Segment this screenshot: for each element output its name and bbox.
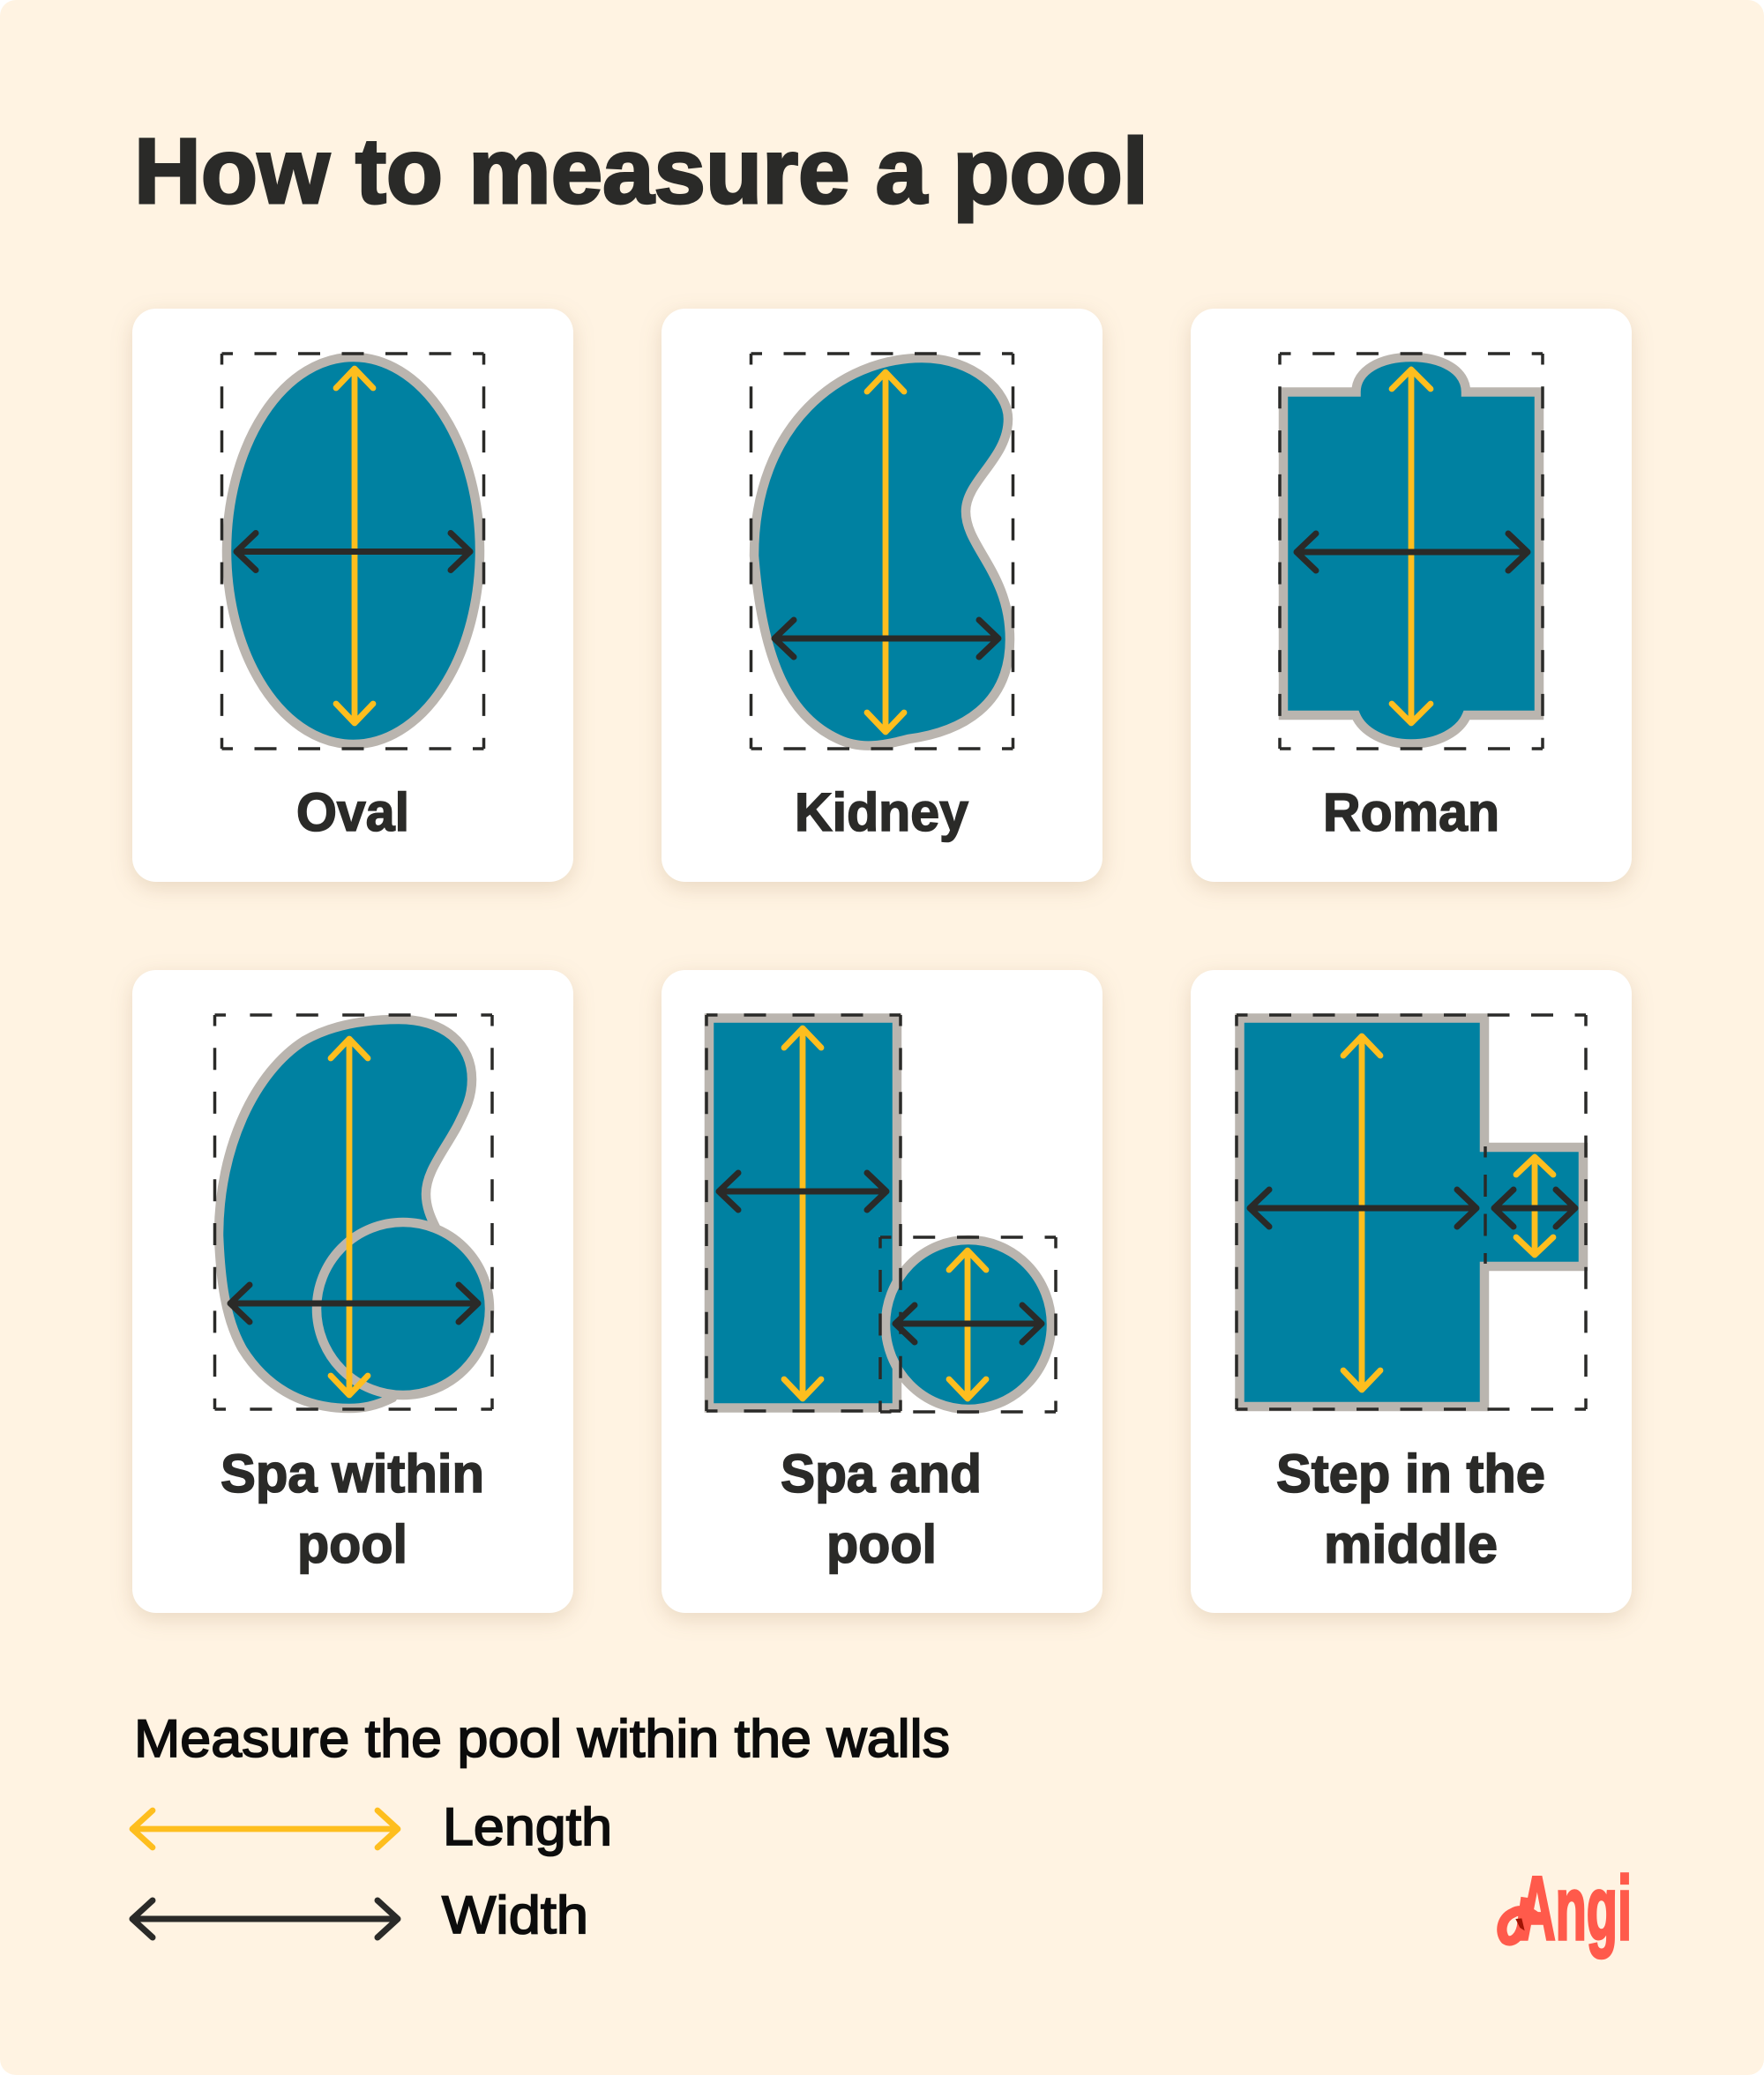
pool shape: rectangle	[709, 1018, 897, 1407]
length arrow: pool	[784, 1028, 821, 1399]
legend: width	[132, 1885, 588, 1944]
length arrow: step	[1516, 1157, 1553, 1255]
width arrow	[236, 533, 470, 570]
label: spa and pool	[781, 1444, 982, 1574]
width arrow: step	[1494, 1190, 1575, 1227]
label: roman: Roman	[1323, 782, 1499, 842]
length arrow: spa	[949, 1250, 986, 1399]
length arrow	[1392, 369, 1431, 723]
width arrow	[230, 1285, 478, 1322]
label: step in the middle	[1276, 1444, 1545, 1574]
pool shape: kidney with spa	[219, 1019, 472, 1408]
panel: roman	[1191, 309, 1632, 882]
legend: length: Length	[443, 1797, 612, 1856]
panel: spa within pool	[132, 970, 573, 1613]
logo: Angi	[1502, 1858, 1632, 1959]
label: spa within pool: pool	[297, 1514, 407, 1574]
label: spa and pool: Spa and	[781, 1444, 982, 1504]
legend heading: Measure the pool within the walls	[134, 1709, 950, 1768]
length arrow	[867, 372, 904, 732]
label: oval: Oval	[296, 782, 409, 842]
length arrow	[336, 369, 373, 723]
pool shape: oval	[227, 357, 480, 744]
pool shape: roman	[1283, 357, 1539, 744]
panel: kidney	[662, 309, 1102, 882]
panel: step in the middle	[1191, 970, 1632, 1613]
pool shape: kidney	[754, 358, 1010, 746]
width arrow	[1297, 534, 1528, 571]
width arrow: spa	[895, 1305, 1042, 1342]
title: How to measure a pool	[134, 120, 1148, 223]
legend: length	[132, 1797, 612, 1856]
logo: Angi: Angi	[1519, 1858, 1632, 1959]
label: spa within pool	[220, 1444, 484, 1574]
length arrow	[331, 1039, 368, 1395]
pool shape: rectangle with step	[1240, 1018, 1583, 1407]
label: step in the middle: Step in the	[1276, 1444, 1545, 1504]
width arrow	[774, 620, 998, 657]
label: kidney: Kidney	[795, 782, 968, 842]
width arrow: pool	[719, 1173, 886, 1210]
length arrow: pool	[1343, 1036, 1380, 1390]
panel: spa and pool	[662, 970, 1102, 1613]
label: spa and pool: pool	[826, 1514, 937, 1574]
panel: oval	[132, 309, 573, 882]
spa circle	[886, 1240, 1051, 1409]
label: spa within pool: Spa within	[220, 1444, 484, 1504]
label: step in the middle: middle	[1324, 1514, 1498, 1574]
legend: width: Width	[442, 1885, 588, 1944]
spa circle	[317, 1222, 490, 1395]
width arrow: pool	[1250, 1190, 1476, 1227]
